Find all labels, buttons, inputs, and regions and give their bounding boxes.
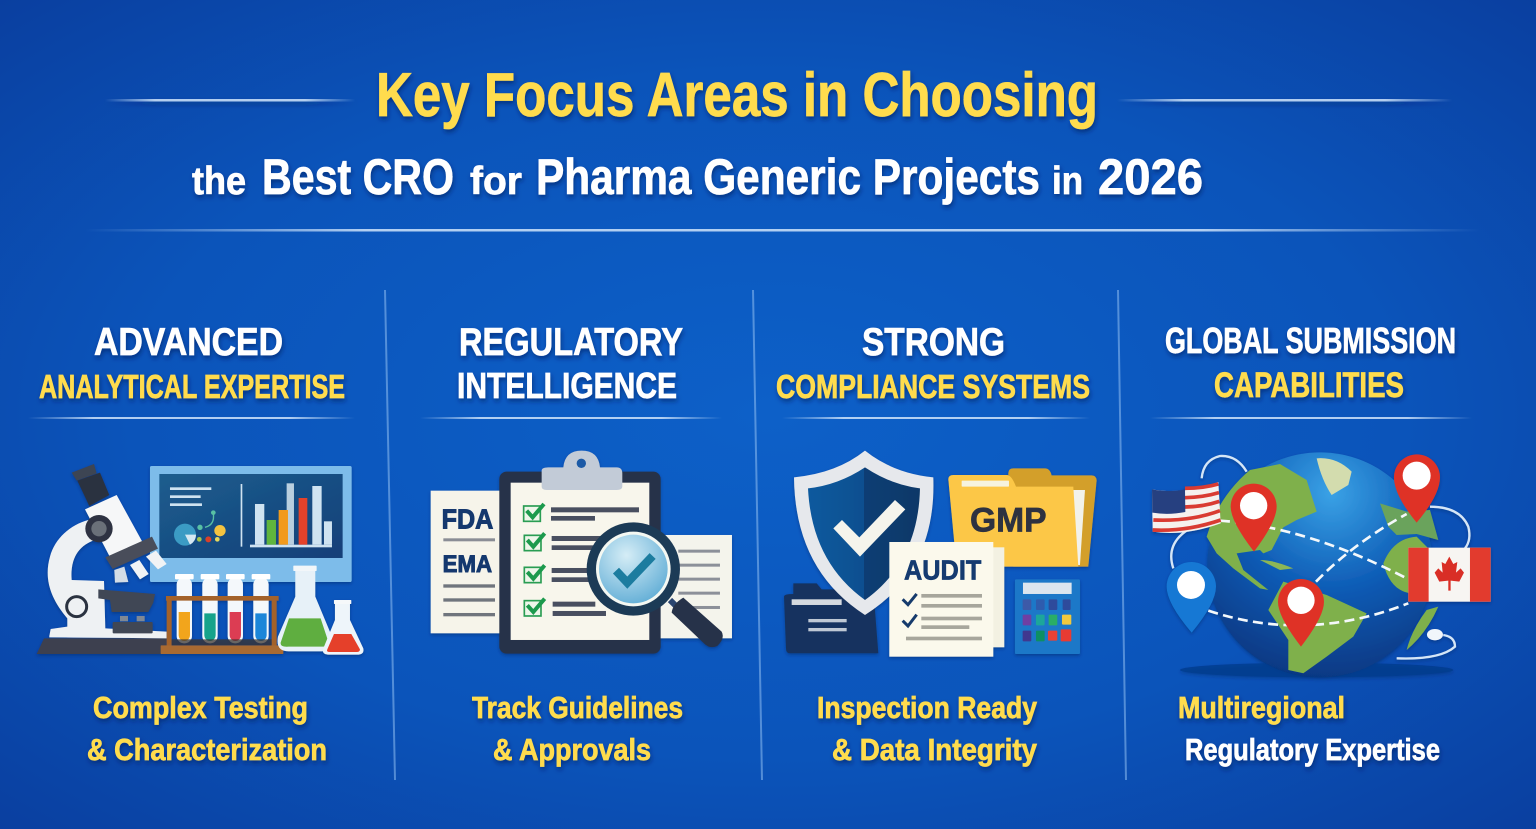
- subtitle: for: [470, 160, 522, 203]
- caption: multiregional regulatory expertise: Multiregional: [1178, 690, 1345, 725]
- globe: [1207, 452, 1433, 678]
- heading: strong compliance systems: [776, 321, 1090, 405]
- icon: shield, GMP folder, audit sheet and calculator: [784, 451, 1097, 657]
- flasks: [278, 571, 332, 651]
- FDA EMA document: [431, 491, 504, 633]
- shield: [794, 451, 933, 615]
- icon: laboratory microscope, monitor and glassware: [37, 464, 364, 655]
- calculator: [1015, 579, 1080, 654]
- caption: inspection ready and data integrity: Inspection Ready: [817, 690, 1038, 725]
- heading: global submission capabilities: CAPABILITIES: [1214, 366, 1404, 405]
- continents: [1207, 464, 1438, 673]
- caption: complex testing and characterization: [87, 690, 327, 767]
- caption: track guidelines and approvals: Track Guidelines: [472, 690, 683, 725]
- icon: shield, GMP folder, audit sheet and calculator: GMP: [970, 502, 1047, 540]
- caption: track guidelines and approvals: [472, 690, 683, 767]
- caption: complex testing and characterization: Complex Testing: [93, 690, 308, 725]
- magnifier: [670, 600, 687, 617]
- audit sheet: [898, 547, 1004, 647]
- subtitle: Best CRO: [262, 149, 454, 205]
- icon: clipboard checklist with FDA and EMA documents: EMA: [443, 551, 492, 578]
- caption: complex testing and characterization: & Characterization: [87, 732, 327, 767]
- heading: advanced analytical expertise: [39, 321, 345, 405]
- heading: advanced analytical expertise: ANALYTICAL EXPERTISE: [39, 368, 345, 405]
- caption: track guidelines and approvals: & Approvals: [493, 732, 651, 767]
- caption: multiregional regulatory expertise: [1178, 690, 1440, 767]
- title: Key Focus Areas in Choosing: [376, 61, 1098, 130]
- GMP folder: [1008, 468, 1097, 567]
- subtitle: the: [192, 160, 246, 203]
- orbit lines: [1171, 456, 1469, 658]
- flag: Canada: [1408, 548, 1491, 602]
- heading: strong compliance systems: COMPLIANCE SYSTEMS: [776, 368, 1090, 405]
- dark folder: [784, 583, 878, 653]
- red pins: [1231, 454, 1440, 647]
- panel: advanced analytical expertise: [28, 321, 364, 767]
- subtitle: 2026: [1098, 149, 1203, 205]
- caption: multiregional regulatory expertise: Regulatory Expertise: [1185, 732, 1440, 767]
- icon: clipboard checklist with FDA and EMA documents: FDA: [442, 503, 493, 534]
- caption: inspection ready and data integrity: & Data Integrity: [832, 732, 1038, 767]
- subtitle: in: [1052, 160, 1083, 203]
- panel: strong compliance systems: [776, 321, 1097, 767]
- icon: clipboard checklist with FDA and EMA documents: [431, 451, 732, 654]
- heading: global submission capabilities: [1165, 320, 1456, 405]
- caption: inspection ready and data integrity: [817, 690, 1038, 767]
- test tubes: [175, 574, 270, 643]
- monitor: [150, 466, 352, 582]
- heading: regulatory intelligence: [457, 321, 683, 406]
- heading: strong compliance systems: STRONG: [862, 321, 1005, 364]
- panel: global submission capabilities: [1150, 320, 1491, 767]
- microscope: [37, 638, 167, 654]
- blue pin: [1167, 562, 1216, 633]
- icon: shield, GMP folder, audit sheet and calculator: AUDIT: [904, 554, 981, 585]
- subtitle: Pharma Generic Projects: [536, 149, 1040, 205]
- heading: regulatory intelligence: REGULATORY: [459, 321, 683, 364]
- clipboard: [499, 472, 661, 654]
- dashed routes: [1208, 514, 1408, 625]
- heading: regulatory intelligence: INTELLIGENCE: [457, 365, 677, 406]
- flag: USA: [1152, 482, 1221, 533]
- icon: globe with location pins and flags: [1152, 452, 1491, 678]
- rack: [166, 596, 279, 647]
- panel: regulatory intelligence: [420, 321, 732, 767]
- heading: advanced analytical expertise: ADVANCED: [94, 321, 283, 364]
- checks: [524, 506, 541, 616]
- subtitle: [192, 149, 1203, 205]
- right document: [653, 535, 732, 638]
